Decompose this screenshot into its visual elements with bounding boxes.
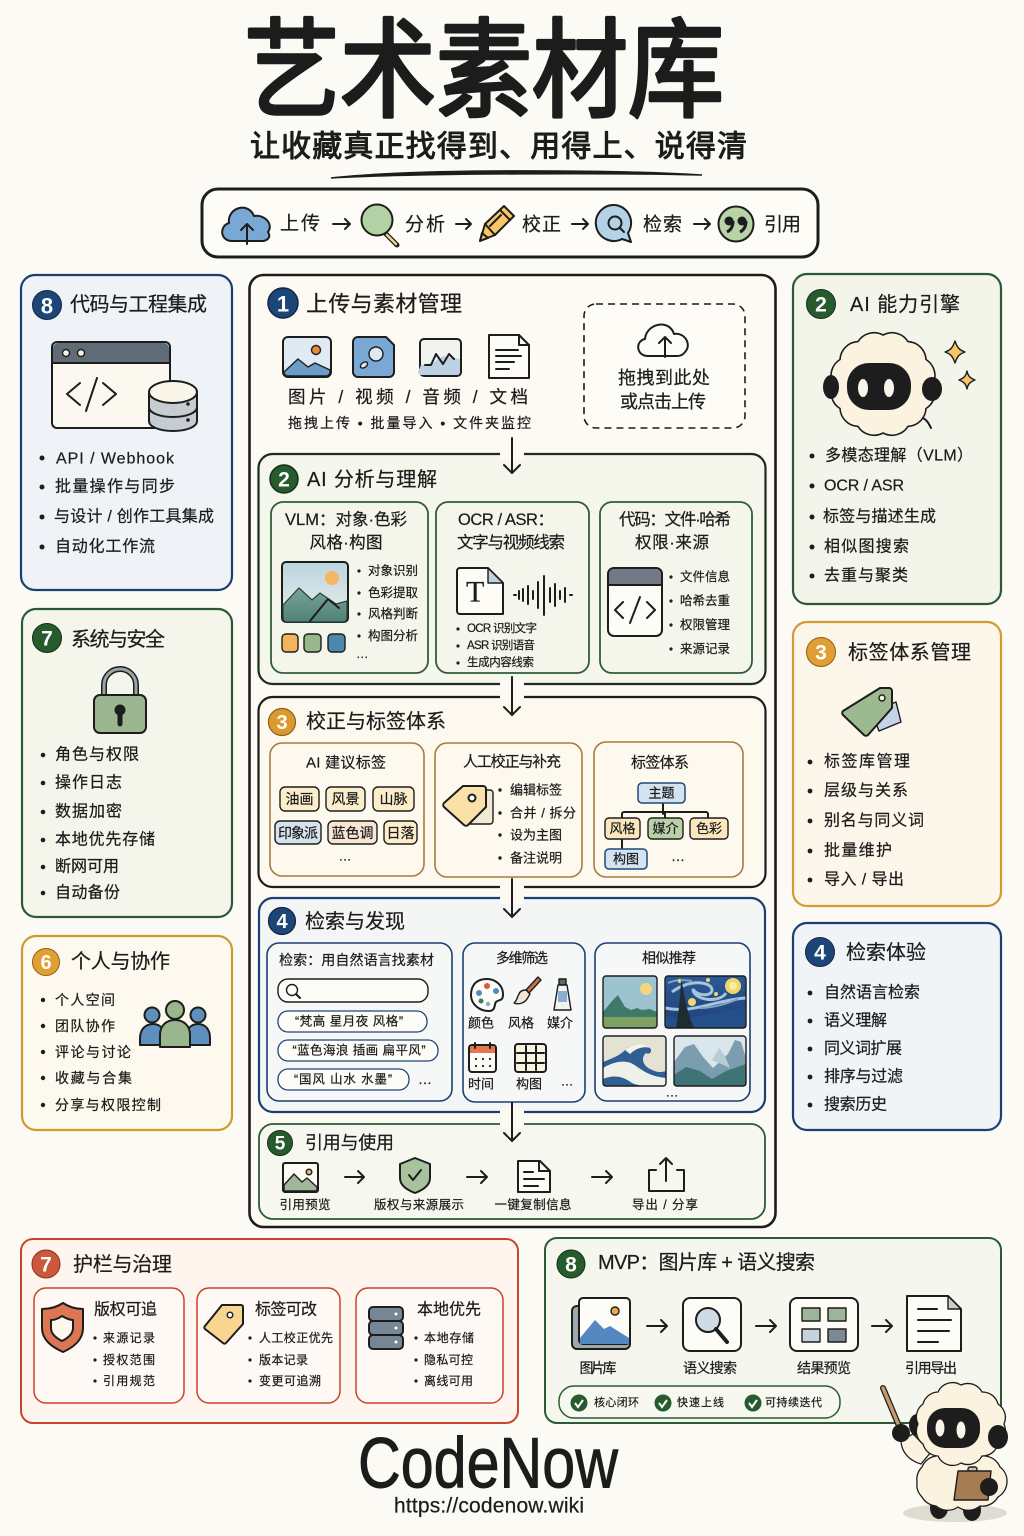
icon: tags	[842, 688, 901, 736]
bullets: 操作日志	[55, 774, 122, 792]
bullets: 来源记录	[103, 1331, 155, 1345]
bullets: 收藏与合集	[55, 1070, 132, 1086]
painting: starry night	[665, 976, 746, 1028]
step labels: 图片库	[580, 1360, 616, 1376]
bullets: 去重与聚类	[824, 566, 908, 584]
icon: cloud upload	[638, 325, 688, 357]
icon: document export	[907, 1296, 961, 1351]
arrow: 4 to 5	[500, 1103, 524, 1141]
bullets: 批量操作与同步	[55, 478, 175, 496]
logo: CodeNow: CodeNow	[358, 1424, 619, 1504]
bullets: 分享与权限控制	[55, 1097, 161, 1113]
icon: calendar	[469, 1043, 496, 1072]
icon: tag	[204, 1305, 243, 1344]
badge 5: 5	[275, 1134, 286, 1154]
bullets: 设为主图	[510, 828, 562, 842]
bullets	[669, 569, 731, 656]
panel: code and engineering integration	[21, 275, 232, 590]
icon: people	[140, 1001, 210, 1047]
dropzone: 或点击上传	[620, 392, 706, 412]
bullets: 本地存储	[424, 1330, 474, 1345]
bullets	[414, 1330, 474, 1388]
card: VLM: 风格·构图	[310, 533, 382, 552]
card: filters	[463, 943, 585, 1102]
pill: benefits: 快速上线	[677, 1395, 724, 1409]
icon: paint tube	[554, 979, 571, 1010]
panel: main pipeline frame	[250, 275, 776, 1227]
arrow	[467, 1171, 487, 1183]
card: OCR ASR: OCR / ASR：	[458, 511, 554, 529]
panel: guardrails and governance	[21, 1239, 518, 1423]
heading: AI 能力引擎	[850, 293, 960, 316]
bullets: 层级与关系	[824, 782, 908, 800]
icon: quote	[718, 206, 754, 242]
bullets: 别名与同义词	[824, 812, 924, 830]
badge 4	[268, 908, 296, 934]
bullets: OCR 识别文字	[467, 621, 537, 635]
arrow	[694, 219, 710, 229]
card: similar recommendations: 相似推荐	[642, 950, 696, 966]
badge 4	[806, 938, 834, 966]
card: code: 权限·来源	[635, 533, 709, 552]
bullets: 色彩提取	[368, 585, 419, 600]
card: filters: …	[560, 1074, 574, 1088]
bullets	[356, 564, 419, 661]
icon: share	[649, 1158, 684, 1191]
bullets	[93, 1331, 155, 1388]
bullets: 来源记录	[680, 642, 730, 656]
heading: 代码与工程集成	[70, 293, 207, 316]
card: filters: 时间	[468, 1076, 494, 1092]
card: OCR ASR: 文字与视频线索	[457, 533, 565, 552]
bullets	[808, 752, 924, 888]
upload methods: 拖拽上传 • 批量导入 • 文件夹监控	[288, 415, 531, 431]
arrow	[345, 1171, 364, 1183]
workflow strip	[202, 189, 818, 257]
heading: 护栏与治理	[73, 1253, 172, 1276]
badge 8: 8	[41, 294, 53, 318]
bullets: API / Webhook	[56, 450, 175, 468]
icon: upload cloud	[222, 208, 270, 244]
card: local first	[356, 1288, 503, 1403]
card: similar recommendations	[595, 943, 750, 1101]
painting: ink mountains	[674, 1036, 746, 1086]
painting: mountain sun	[603, 976, 657, 1028]
bullets: 与设计 / 创作工具集成	[54, 508, 214, 526]
card: taxonomy tree: 标签体系	[631, 754, 689, 772]
bullets: …	[356, 647, 368, 661]
icon: image library	[572, 1298, 630, 1349]
bullets: 离线可用	[424, 1373, 473, 1388]
bullets: 隐私可控	[424, 1353, 473, 1367]
badge 8: 8	[565, 1254, 577, 1276]
card: AI suggested tags: …	[338, 848, 352, 864]
bullets: 排序与过滤	[824, 1068, 903, 1086]
heading: 标签体系管理	[848, 641, 971, 664]
card: manual correction	[435, 743, 582, 877]
bullets	[810, 446, 973, 584]
bullets: 同义词扩展	[824, 1040, 902, 1058]
icon: lock	[94, 669, 146, 733]
bullets: 权限管理	[680, 617, 731, 632]
step labels: 导出 / 分享	[632, 1197, 698, 1212]
card: AI suggested tags	[270, 743, 424, 876]
panel: tag system management	[793, 622, 1001, 906]
card: tags editable	[197, 1288, 340, 1403]
label: analyze: 分析	[405, 214, 445, 236]
badge 2	[806, 290, 836, 318]
card: taxonomy tree	[594, 742, 743, 877]
icon: audio	[418, 339, 461, 376]
bullets	[40, 450, 214, 556]
bullets: 多模态理解（VLM）	[825, 446, 973, 464]
heading: 上传与素材管理	[306, 292, 462, 316]
bullets	[41, 992, 161, 1113]
icon: pencil	[480, 206, 514, 241]
heading: AI 分析与理解	[307, 468, 437, 491]
badge 6: 6	[40, 952, 52, 974]
tag chips: 油画	[286, 791, 314, 807]
bullets: 数据加密	[55, 802, 122, 820]
icon: shield check	[400, 1158, 430, 1193]
painting: great wave	[603, 1036, 666, 1086]
icon: code window	[608, 568, 662, 636]
dropzone text: 拖拽到此处	[618, 368, 710, 388]
icon: code window with database	[52, 342, 197, 431]
panel: search experience	[793, 923, 1001, 1130]
bullets: 生成内容线索	[467, 655, 534, 669]
icon: results grid	[790, 1298, 858, 1351]
badge 3	[268, 708, 296, 736]
badge 8	[32, 290, 62, 320]
media labels: 图片 / 视频 / 音频 / 文档	[288, 387, 528, 407]
pill: benefits	[559, 1386, 840, 1418]
label: upload: 上传	[280, 212, 320, 234]
arrow	[572, 219, 588, 229]
card: taxonomy tree: 媒介	[652, 821, 679, 836]
badge 1: 1	[277, 292, 289, 316]
bullets	[808, 984, 920, 1114]
section 4: search	[259, 898, 765, 1112]
bullets: 文件信息	[680, 569, 730, 584]
card: manual correction: 人工校正与补充	[463, 754, 561, 770]
section 1: upload	[268, 288, 745, 431]
bullets: 备注说明	[510, 850, 562, 866]
title: 艺术素材库	[244, 11, 724, 131]
bullets: 断网可用	[55, 858, 119, 876]
tag chips: 山脉	[380, 791, 408, 807]
bullets: 团队协作	[55, 1018, 115, 1034]
bullets: 个人空间	[55, 992, 115, 1008]
card: taxonomy tree: 色彩	[696, 821, 722, 836]
card: taxonomy tree: 构图	[613, 852, 639, 866]
arrow	[647, 1320, 667, 1332]
card: similar recommendations: …	[666, 1084, 678, 1100]
arrow	[456, 219, 471, 229]
bullets: 标签库管理	[824, 752, 910, 770]
bullets: 合并 / 拆分	[510, 806, 576, 820]
bullets: 本地优先存储	[55, 830, 155, 848]
card: VLM	[271, 502, 428, 673]
card: filters: 构图	[516, 1076, 542, 1092]
bullets	[41, 746, 155, 902]
arrow	[592, 1171, 612, 1183]
icon: brush	[514, 977, 541, 1004]
mascot: sheep with pointer and clipboard	[883, 1383, 1008, 1522]
label: correct: 校正	[522, 214, 561, 236]
section 3: correction and tags	[258, 697, 766, 887]
panel: system and security	[22, 609, 232, 917]
bullets: 风格判断	[368, 606, 418, 621]
bullets: 评论与讨论	[55, 1044, 131, 1060]
tag chips: 风景	[332, 791, 360, 807]
query pills: “梵高 星月夜 风格”	[295, 1014, 403, 1028]
card: filters: 媒介	[547, 1016, 573, 1030]
bullets: 批量维护	[824, 842, 892, 860]
step labels: 语义搜索	[683, 1360, 737, 1376]
dropzone	[584, 304, 745, 428]
badge 3	[806, 638, 836, 666]
url: https://codenow.wiki	[394, 1494, 584, 1518]
bullets: 构图分析	[368, 628, 418, 643]
badge 7	[32, 1250, 60, 1278]
subtitle: 让收藏真正找得到、用得上、说得清	[250, 130, 747, 164]
tag chips: 印象派	[278, 825, 318, 841]
pill: benefits: 可持续迭代	[765, 1395, 822, 1409]
card title: 本地优先	[417, 1300, 481, 1318]
bullets: 自动化工作流	[55, 538, 155, 556]
icon: composition grid	[515, 1044, 546, 1072]
tag chips: 蓝色调	[332, 825, 374, 841]
card: AI suggested tags: AI 建议标签	[306, 754, 386, 772]
icon: shield	[42, 1303, 83, 1352]
card: natural language search: 检索：用自然语言找素材	[279, 952, 434, 968]
bullets: 人工校正优先	[259, 1330, 333, 1345]
bullets: 角色与权限	[55, 746, 139, 764]
card: code	[600, 502, 752, 673]
badge 1	[268, 288, 298, 318]
bullets	[456, 621, 537, 669]
badge 4: 4	[276, 911, 288, 933]
icon: text document: T	[466, 576, 484, 608]
label: cite: 引用	[764, 214, 801, 236]
bullets: 哈希去重	[680, 593, 730, 608]
badge 4: 4	[814, 942, 826, 964]
arrow: 3 to 4	[500, 879, 524, 917]
icon: server	[369, 1307, 403, 1349]
bullets: 变更可追溯	[259, 1373, 321, 1388]
swatches	[282, 634, 345, 652]
icon: semantic search	[683, 1298, 741, 1351]
step labels: 引用预览	[280, 1197, 330, 1212]
bullets: 授权范围	[103, 1352, 155, 1367]
bullets	[248, 1330, 333, 1388]
card title: 标签可改	[255, 1300, 317, 1318]
bullets: 引用规范	[103, 1373, 155, 1388]
heading: MVP：图片库 + 语义搜索	[598, 1251, 815, 1274]
card: natural language search	[267, 943, 452, 1101]
badge 5	[268, 1130, 292, 1156]
step labels: 结果预览	[797, 1360, 851, 1376]
icon: sheep mascot head	[823, 333, 942, 435]
tag chips: 日落	[386, 825, 414, 841]
badge 2	[270, 465, 298, 493]
arrow	[872, 1320, 892, 1332]
panel: MVP	[545, 1238, 1001, 1423]
heading: 个人与协作	[71, 950, 170, 973]
heading: 系统与安全	[71, 628, 165, 651]
icon: image preview	[283, 1163, 318, 1192]
pill: benefits: 核心闭环	[594, 1395, 639, 1409]
arrow: 2 to 3	[500, 677, 524, 715]
icon: copy document	[518, 1161, 550, 1192]
query pills: “蓝色海浪 插画 扁平风”	[292, 1042, 426, 1058]
bullets: 对象识别	[368, 564, 418, 578]
icon: document	[489, 335, 529, 378]
bullets: 标签与描述生成	[823, 508, 936, 526]
card: code: 代码：文件·哈希	[619, 510, 731, 529]
step labels	[580, 1360, 957, 1376]
subtitle underline	[331, 171, 702, 178]
icon: search bubble	[596, 205, 631, 242]
label: search: 检索	[643, 214, 682, 236]
icon: tags	[443, 786, 493, 826]
icon: sparkles	[945, 341, 975, 389]
card: filters: 颜色	[468, 1016, 494, 1030]
bullets: ASR 识别语音	[467, 638, 535, 652]
badge 7: 7	[40, 1254, 52, 1276]
icon: landscape	[282, 562, 348, 622]
card title: 版权可追	[94, 1300, 157, 1318]
tag chips	[275, 787, 417, 844]
step labels: 版权与来源展示	[374, 1197, 464, 1212]
heading: 校正与标签体系	[306, 710, 446, 733]
card: taxonomy tree: …	[671, 848, 685, 864]
search bar	[278, 979, 428, 1002]
card: natural language search: …	[418, 1071, 432, 1087]
bullets: 语义理解	[824, 1012, 887, 1030]
icon: palette	[471, 979, 503, 1011]
card: VLM: VLM：对象·色彩	[285, 510, 408, 529]
badge 8	[557, 1250, 585, 1278]
bullets: 搜索历史	[824, 1096, 887, 1114]
badge 3: 3	[815, 642, 827, 664]
card: filters: 风格	[508, 1016, 534, 1030]
badge 2: 2	[278, 468, 290, 492]
badge 3: 3	[276, 712, 288, 734]
card: filters: 多维筛选	[496, 950, 548, 966]
icon: image	[283, 337, 331, 377]
section 5: citation and use	[259, 1124, 765, 1219]
step labels: 引用导出	[905, 1360, 957, 1376]
bullets: 自动备份	[55, 884, 120, 902]
step labels	[280, 1197, 698, 1212]
badge 7	[32, 624, 62, 652]
bullets	[498, 782, 576, 866]
step labels: 一键复制信息	[494, 1197, 572, 1212]
heading: 检索体验	[846, 941, 926, 964]
panel: personal and collaboration	[22, 936, 232, 1130]
arrow: 1 to 2	[500, 438, 524, 473]
icon: text document	[457, 568, 503, 614]
heading: 引用与使用	[305, 1133, 394, 1153]
badge 6	[32, 948, 60, 976]
query pills	[278, 1011, 438, 1090]
query pills: “国风 山水 水墨”	[294, 1072, 392, 1086]
arrow	[333, 219, 350, 229]
card: copyright traceable	[34, 1288, 184, 1403]
bullets: 相似图搜索	[824, 538, 909, 556]
icon: video	[353, 337, 394, 377]
bullets: 编辑标签	[510, 782, 562, 798]
card: taxonomy tree: 风格	[609, 821, 636, 836]
icon: waveform	[514, 576, 572, 615]
card: OCR ASR	[436, 502, 589, 673]
badge 2: 2	[815, 294, 827, 316]
section 2: AI analysis	[258, 454, 766, 684]
heading: 检索与发现	[305, 910, 405, 933]
bullets: 导入 / 导出	[824, 870, 904, 888]
bullets: OCR / ASR	[824, 478, 904, 494]
badge 7: 7	[41, 628, 53, 650]
panel: AI capability engine	[793, 274, 1001, 604]
bullets: 自然语言检索	[824, 984, 920, 1002]
arrow	[756, 1320, 776, 1332]
icon: magnifier	[362, 204, 397, 245]
card: taxonomy tree: 主题	[648, 786, 675, 800]
bullets: 版本记录	[259, 1353, 308, 1367]
